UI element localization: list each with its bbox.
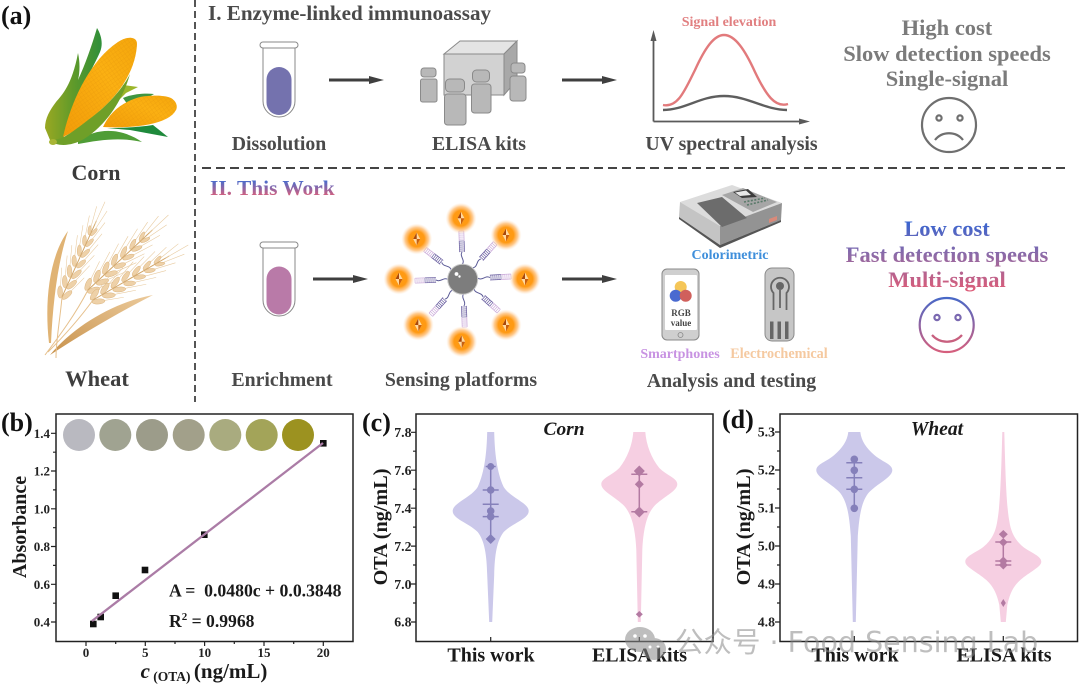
y axis tick labels: 5.3 — [758, 424, 775, 440]
fit line — [92, 443, 323, 621]
icon: spectrophotometer — [679, 185, 782, 248]
y axis title: Absorbance — [9, 476, 31, 578]
label: Smartphones: Smartphones — [640, 347, 720, 362]
subtitle: Corn: Corn — [544, 419, 584, 440]
icon: chat bubbles — [625, 627, 666, 660]
subtitle: Wheat: Wheat — [911, 419, 964, 440]
y axis tick labels: 1.2 — [34, 464, 50, 478]
y axis tick labels: 7.0 — [394, 577, 412, 592]
panel: (b) calibration curve — [1, 408, 353, 684]
y axis tick labels: 5.2 — [758, 462, 775, 478]
R squared: 2 — [182, 611, 188, 623]
icon: smartphone RGB: RGB — [671, 308, 691, 318]
panel label (d): (d) — [722, 405, 754, 434]
icon: test tube with pink solution — [260, 242, 298, 316]
heading: II. This Work: II. This Work — [210, 176, 335, 200]
equation: A = 0.0480c + 0.0.3848 — [169, 580, 342, 600]
category labels — [811, 644, 1052, 666]
y axis tick labels: 7.8 — [394, 425, 412, 440]
icon: smiley face — [920, 298, 974, 352]
label: Corn: Corn — [72, 160, 120, 185]
label: Signal elevation: Signal elevation — [682, 15, 776, 30]
y axis title: OTA (ng/mL) — [370, 469, 392, 585]
text block: drawbacks — [843, 15, 1051, 91]
panel: (d) wheat violin plot — [722, 405, 1078, 666]
panel label (b): (b) — [1, 408, 33, 437]
category labels — [447, 644, 687, 666]
y axis tick labels: 4.8 — [758, 614, 775, 630]
icon: wheat — [45, 197, 195, 358]
panel label (c): (c) — [362, 408, 391, 437]
category labels: ELISA kits — [592, 644, 687, 666]
x axis tick labels: 10 — [198, 645, 211, 660]
x axis title: c — [141, 659, 151, 683]
y axis tick labels: 7.4 — [394, 501, 412, 516]
y axis tick labels: 5.0 — [758, 538, 775, 554]
icon: ELISA kit box and vials — [420, 41, 526, 125]
label: Electrochemical: Electrochemical — [730, 346, 828, 362]
R squared: = 0.9968 — [187, 611, 255, 631]
label: Wheat: Wheat — [65, 366, 129, 391]
icon: nanoparticle sensing platform — [384, 203, 540, 357]
y axis tick labels — [34, 426, 50, 630]
label: Sensing platforms: Sensing platforms — [385, 369, 537, 391]
y axis tick labels — [758, 424, 775, 630]
text block: advantages: Fast detection speeds — [846, 242, 1048, 267]
divider: vertical dashed line — [194, 0, 196, 402]
panel label (a): (a) — [1, 1, 31, 30]
y axis tick labels: 6.8 — [394, 614, 412, 630]
label: Enrichment: Enrichment — [231, 369, 333, 391]
y axis tick labels: 1.4 — [34, 426, 50, 441]
label: Colorimetric: Colorimetric — [692, 248, 768, 263]
y axis tick labels: 7.2 — [394, 539, 412, 554]
axis ticks — [411, 432, 639, 642]
icon: smartphone RGB: value — [671, 318, 691, 328]
x axis tick labels — [83, 645, 330, 660]
label: Analysis and testing: Analysis and testing — [647, 370, 816, 392]
colour swatches — [63, 419, 314, 451]
x axis tick labels: 20 — [317, 645, 330, 660]
R squared: R — [169, 611, 182, 631]
arrow: enrichment to sensing — [313, 275, 368, 283]
icon: test tube with purple solution — [260, 42, 298, 117]
x axis title: (OTA) — [150, 669, 194, 684]
x axis tick labels: 0 — [83, 645, 89, 660]
arrow: kits to UV analysis — [562, 76, 617, 84]
icon: sad face — [922, 98, 976, 152]
text block: advantages — [846, 216, 1048, 292]
y axis tick labels: 0.6 — [34, 577, 50, 592]
arrow: dissolution to kits — [329, 76, 384, 84]
y axis tick labels: 4.9 — [758, 576, 775, 592]
icon: smartphone RGB — [662, 269, 699, 340]
label: Dissolution: Dissolution — [232, 133, 326, 155]
violin: this work (wheat) — [816, 432, 892, 622]
x axis title: (ng/mL) — [194, 659, 267, 683]
text block: drawbacks: Slow detection speeds — [843, 41, 1051, 66]
violin: ELISA kits (corn) — [601, 432, 677, 622]
panel: (a) workflow overview — [1, 0, 1068, 402]
watermark: WeChat account name: 公众号 · Food Sensing Lab — [675, 626, 1038, 659]
text block: advantages: Multi-signal — [888, 267, 1006, 292]
plot frame — [56, 414, 353, 642]
axis ticks — [51, 433, 323, 646]
category labels: This work — [811, 644, 899, 666]
chart: UV spectrum sketch — [650, 15, 810, 124]
axis ticks — [775, 432, 1003, 642]
y axis tick labels — [394, 425, 412, 630]
y axis tick labels: 0.4 — [34, 614, 50, 630]
label: ELISA kits: ELISA kits — [432, 133, 526, 155]
plot frame — [416, 414, 713, 642]
arrow: sensing to analysis — [562, 275, 617, 283]
x axis tick labels: 5 — [142, 645, 149, 660]
plot frame — [780, 414, 1078, 642]
x axis tick labels: 15 — [258, 645, 271, 660]
violin: ELISA kits (wheat) — [965, 432, 1041, 622]
icon: corn — [45, 28, 177, 145]
divider: horizontal dashed line — [202, 167, 1068, 169]
category labels: ELISA kits — [956, 644, 1052, 666]
label: UV spectral analysis: UV spectral analysis — [645, 133, 818, 155]
heading: I. Enzyme-linked immunoassay: I. Enzyme-linked immunoassay — [208, 1, 491, 25]
category labels: This work — [447, 644, 535, 666]
text block: drawbacks: Single-signal — [886, 66, 1008, 91]
y axis tick labels: 0.8 — [34, 539, 50, 554]
data points — [90, 440, 327, 627]
panel: (c) corn violin plot — [362, 408, 713, 666]
text block: advantages: Low cost — [904, 216, 990, 241]
y axis tick labels: 7.6 — [394, 463, 412, 478]
y axis title: OTA (ng/mL) — [733, 469, 755, 585]
violin: this work (corn) — [453, 432, 529, 622]
text block: drawbacks: High cost — [902, 15, 993, 40]
y axis tick labels: 1.0 — [34, 502, 50, 516]
icon: electrochemical strip — [765, 268, 794, 341]
y axis tick labels: 5.1 — [758, 500, 775, 516]
